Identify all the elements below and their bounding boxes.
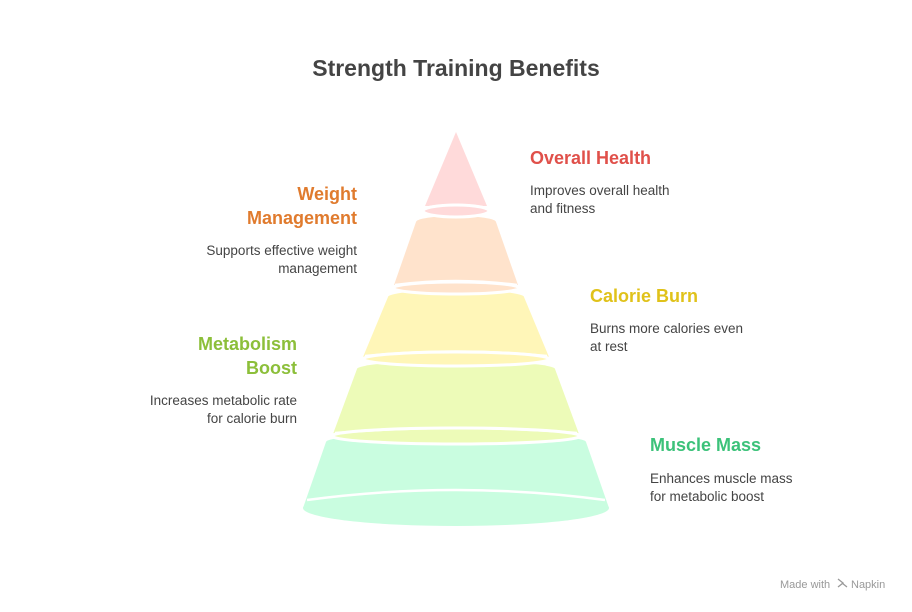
label: calorie burn: Calorie Burn xyxy=(590,286,698,306)
label: muscle mass: for metabolic boost xyxy=(650,489,764,504)
tier: muscle mass xyxy=(303,433,609,526)
label: metabolism boost: Boost xyxy=(246,358,297,378)
tier: weight management xyxy=(393,216,519,294)
tier: calorie burn xyxy=(363,290,549,366)
label: metabolism boost: Increases metabolic rate xyxy=(150,393,297,408)
label: overall health xyxy=(530,148,670,216)
tier: overall health xyxy=(423,132,489,217)
label: overall health: and fitness xyxy=(530,201,596,216)
label: metabolism boost xyxy=(150,334,297,426)
label: muscle mass: Enhances muscle mass xyxy=(650,471,793,486)
pyramid xyxy=(303,132,609,526)
label: muscle mass xyxy=(650,435,793,504)
label: metabolism boost: for calorie burn xyxy=(207,411,297,426)
label: overall health: Improves overall health xyxy=(530,183,670,198)
label: calorie burn xyxy=(590,286,743,354)
label: metabolism boost: Metabolism xyxy=(198,334,297,354)
label: overall health: Overall Health xyxy=(530,148,651,168)
label: calorie burn: Burns more calories even xyxy=(590,321,743,336)
footer: made with napkin: Made with xyxy=(780,579,830,591)
title: Strength Training Benefits xyxy=(312,55,600,81)
label: weight management: management xyxy=(278,261,357,276)
tier: metabolism boost xyxy=(332,361,580,444)
label: muscle mass: Muscle Mass xyxy=(650,435,761,455)
footer: made with napkin: Napkin xyxy=(851,579,885,591)
label: weight management xyxy=(206,184,357,276)
label: weight management: Management xyxy=(247,208,357,228)
footer: made with napkin xyxy=(780,579,885,591)
label: calorie burn: at rest xyxy=(590,339,628,354)
label: weight management: Weight xyxy=(297,184,357,204)
label: weight management: Supports effective weight xyxy=(206,243,357,258)
